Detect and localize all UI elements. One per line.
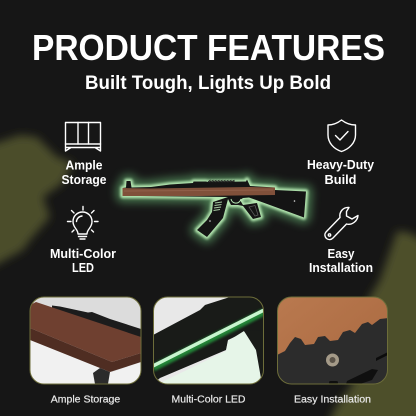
rack — [52, 306, 141, 338]
label: heavy-duty build — [307, 157, 375, 187]
wood top — [30, 302, 141, 362]
label: heavy-duty build: Heavy-Duty — [307, 157, 375, 172]
label: ample storage — [62, 158, 106, 187]
panel: easy installation photo — [277, 297, 388, 384]
icon: shelf — [66, 122, 100, 151]
olive blob left — [0, 135, 73, 268]
screw — [326, 354, 339, 366]
label: multi-color led: Multi-Color — [50, 246, 116, 261]
plate — [277, 318, 388, 384]
panel: ample storage photo — [30, 297, 141, 384]
title: PRODUCT FEATURES — [32, 27, 385, 68]
label: multi-color led — [50, 246, 116, 275]
caption: multi-color led: Multi-Color LED — [172, 394, 246, 406]
wood edge — [30, 328, 141, 372]
icon: shield — [328, 120, 356, 152]
slots — [376, 352, 387, 361]
icon: wrench — [325, 207, 358, 240]
label: heavy-duty build: Build — [324, 172, 357, 187]
product: illuminated rifle — [122, 180, 306, 237]
caption: ample storage: Ample Storage — [51, 394, 120, 406]
led glow — [153, 312, 264, 368]
label: easy installation: Installation — [309, 260, 373, 275]
lit wall — [158, 331, 262, 384]
led strip — [153, 310, 264, 366]
label: easy installation: Easy — [328, 246, 355, 261]
icon: light bulb — [68, 206, 98, 239]
label: multi-color led: LED — [72, 260, 94, 275]
panel: multi-color led photo — [153, 297, 264, 384]
label: easy installation — [309, 246, 373, 275]
black body — [153, 297, 264, 384]
label: ample storage: Ample — [66, 158, 102, 172]
caption: easy installation: Easy Installation — [294, 394, 371, 406]
olive blob right — [326, 231, 416, 416]
subtitle: Built Tough, Lights Up Bold — [85, 72, 331, 94]
label: ample storage: Storage — [62, 172, 106, 187]
bracket — [93, 368, 110, 384]
